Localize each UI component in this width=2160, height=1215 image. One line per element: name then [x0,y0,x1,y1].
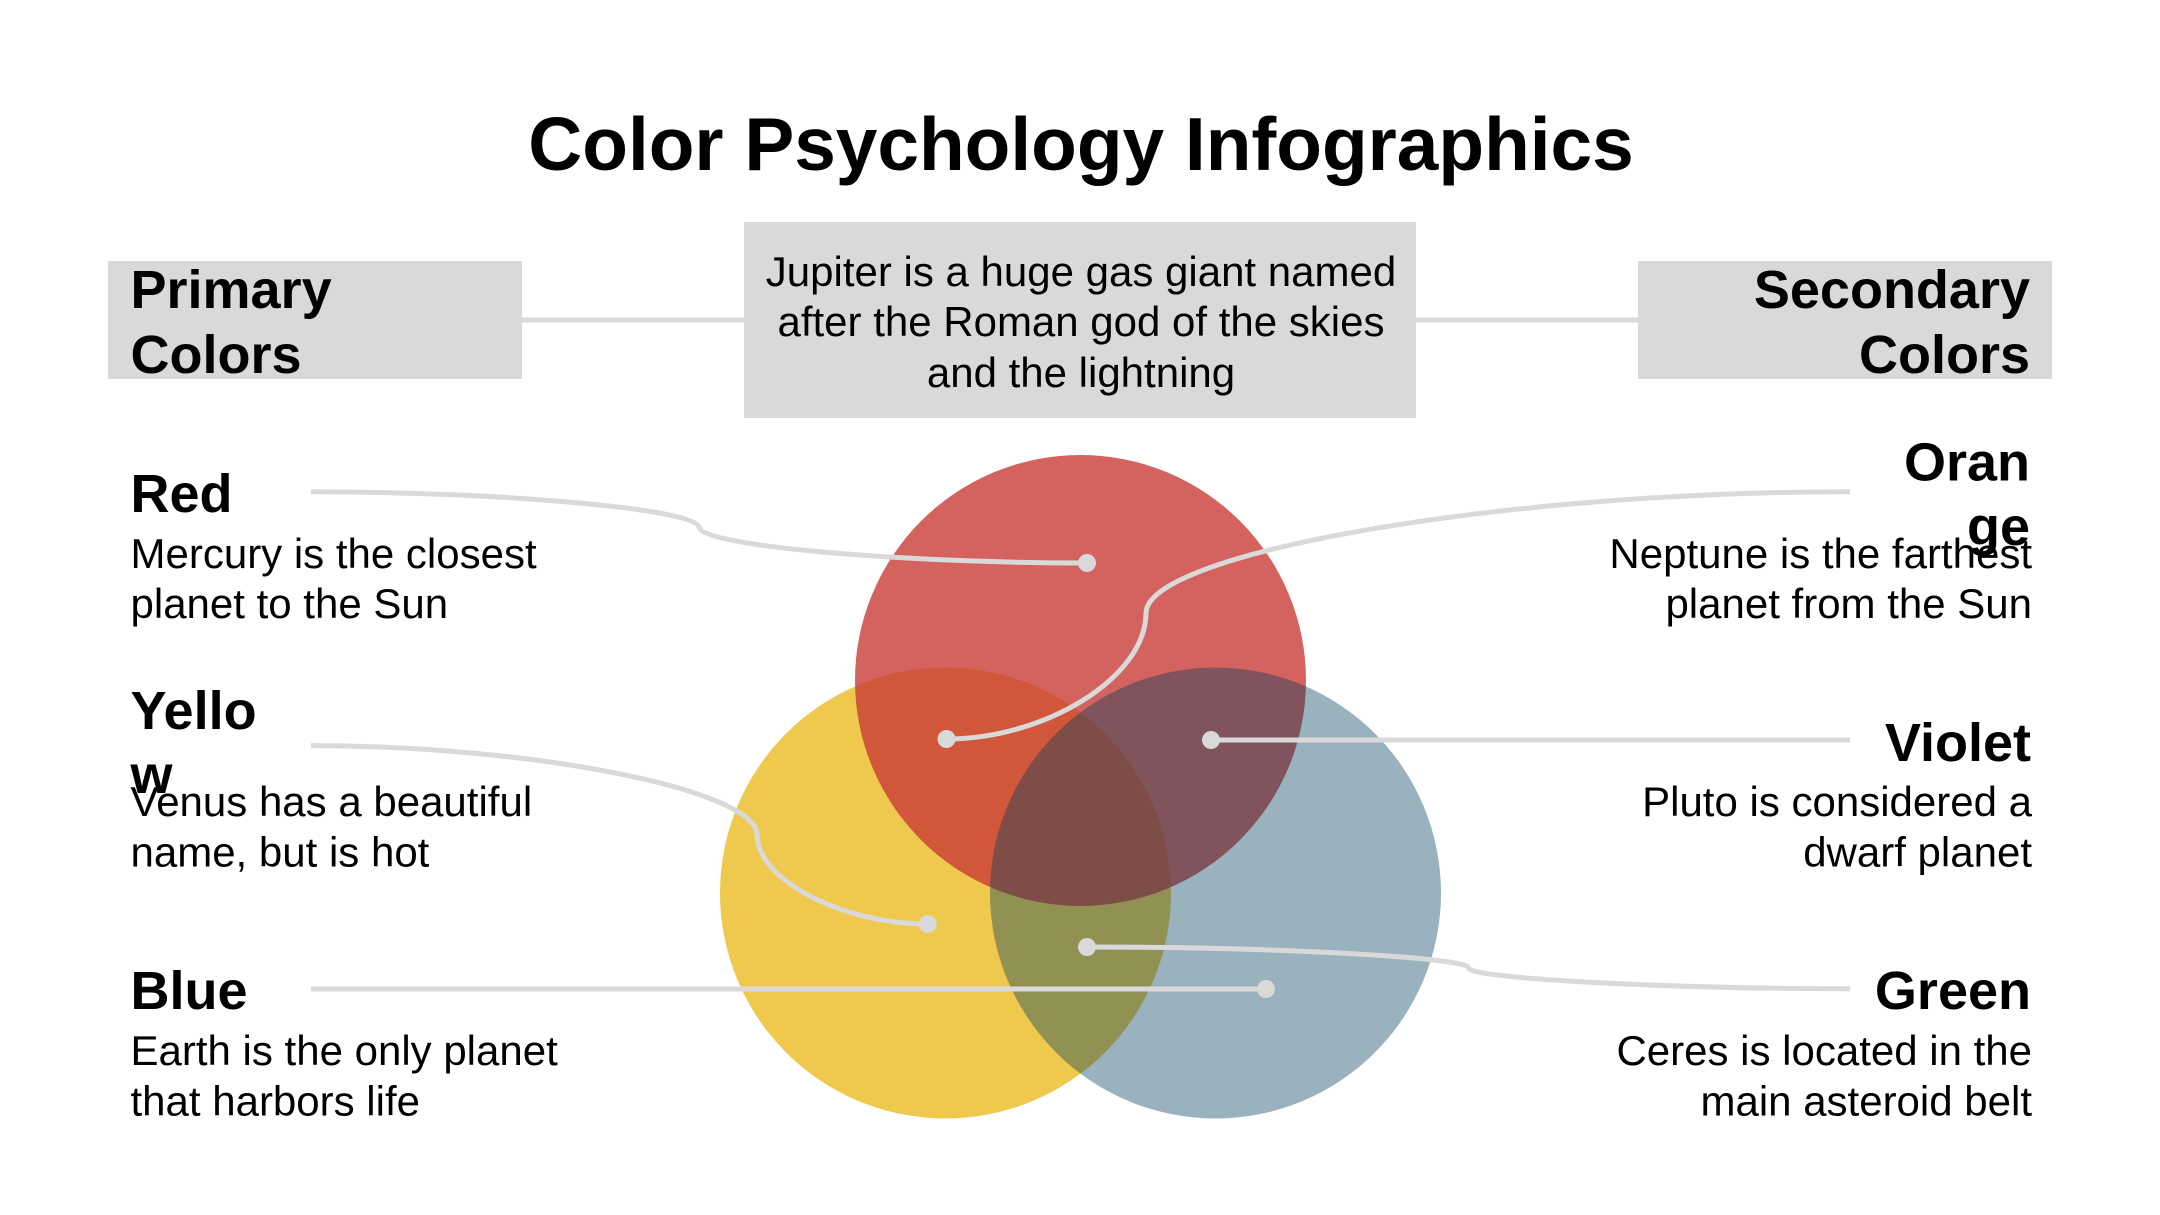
text block: violet: dwarf planet [1803,828,2032,876]
text block: red: Mercury is the closest [130,530,537,577]
text block: yellow [130,681,532,876]
connector: blue [311,980,1275,998]
title: Color Psychology Infographics [528,102,1634,186]
panel: secondary colors heading: Colors [1859,325,2030,385]
circle: yellow [720,668,1171,1118]
connector: red [311,492,1096,572]
panel: primary colors heading: Colors [130,325,302,385]
text block: green: main asteroid belt [1700,1078,2032,1124]
panel: secondary colors heading: Secondary [1754,260,2030,320]
text block: green: Ceres is located in the [1616,1027,2032,1074]
text block: yellow: Yello [130,681,257,741]
text block: green: Green [1875,961,2031,1021]
text block: red: Red [130,464,233,524]
text block: orange [1609,432,2032,627]
text block: yellow: Venus has a beautiful [130,778,532,825]
connector: violet [1202,731,1850,749]
panel: center description: and the lightning [927,349,1235,396]
panel: center description: Jupiter is a huge gas giant named [766,248,1396,295]
connector: primary to center box [521,318,744,322]
text block: red [130,464,537,627]
panel: primary colors heading [108,260,522,385]
text block: violet [1642,713,2033,876]
connector: orange [938,492,1850,748]
text block: orange: Neptune is the farthest [1609,530,2032,577]
text block: yellow: name, but is hot [130,828,430,876]
connector: center box to secondary [1416,318,1638,322]
text block: orange: ge [1967,497,2030,557]
text block: blue: that harbors life [130,1078,420,1124]
text block: orange: Oran [1904,432,2030,492]
text block: violet: Pluto is considered a [1642,778,2033,825]
panel: center description: after the Roman god of the skies [777,298,1385,345]
circle: red [855,455,1306,906]
connector: green [1078,938,1850,989]
panel: secondary colors heading [1638,260,2052,385]
connector: yellow [311,746,937,933]
venn diagram [720,455,1441,1118]
text block: yellow: w [130,745,174,805]
text block: blue [130,961,558,1124]
text block: green [1616,961,2032,1124]
text block: blue: Blue [130,961,248,1021]
circle: blue [990,668,1441,1118]
text block: violet: Violet [1885,713,2031,773]
panel: primary colors heading: Primary [130,260,332,320]
text block: orange: planet from the Sun [1665,580,2032,627]
text block: red: planet to the Sun [130,580,448,627]
panel: center description [744,222,1416,418]
text block: blue: Earth is the only planet [130,1027,558,1074]
